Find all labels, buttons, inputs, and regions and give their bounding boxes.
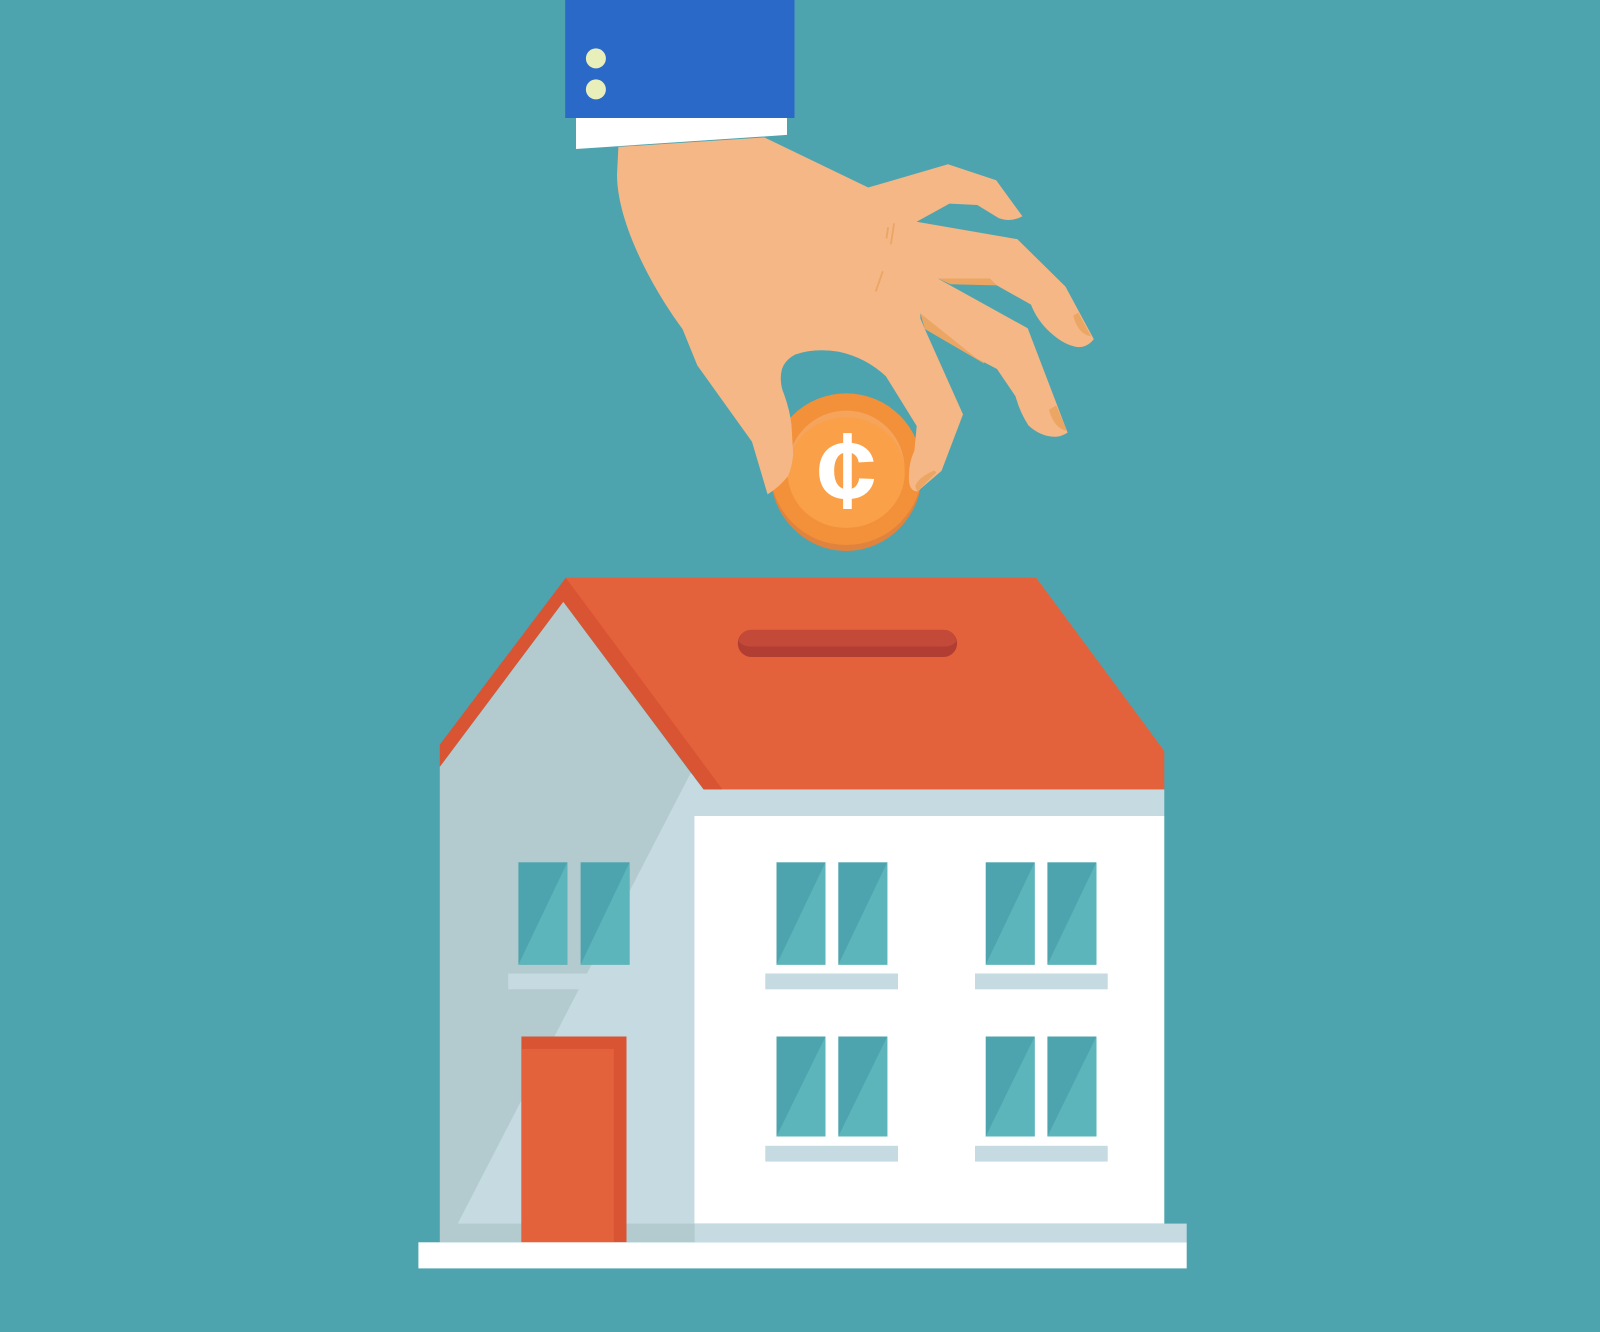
coin slot: [738, 630, 957, 657]
door: [521, 1036, 626, 1242]
knuckle creases: [876, 224, 894, 291]
fingernails: [915, 313, 1091, 491]
front plinth: [694, 1224, 1187, 1242]
gable wall light: [458, 773, 1164, 1224]
lower right front window: [975, 1036, 1108, 1162]
lower left front window: [765, 1036, 898, 1162]
gable window: [508, 862, 640, 989]
roof edge: [440, 578, 722, 789]
hand shape: [617, 137, 1094, 494]
roof: [566, 578, 1164, 789]
hand: [617, 137, 1094, 494]
coin: [770, 393, 922, 551]
front wall: [694, 816, 1164, 1224]
house: [418, 578, 1187, 1268]
shirt cuff: [576, 118, 787, 149]
finger shadows: [920, 278, 997, 364]
upper left front window: [765, 862, 898, 989]
gable wall shade: [440, 602, 694, 1242]
base slab: [418, 1242, 1187, 1268]
upper right front window: [975, 862, 1108, 989]
sleeve buttons: [586, 48, 606, 99]
coin: ¢: [816, 409, 877, 530]
jacket sleeve: [565, 0, 794, 118]
